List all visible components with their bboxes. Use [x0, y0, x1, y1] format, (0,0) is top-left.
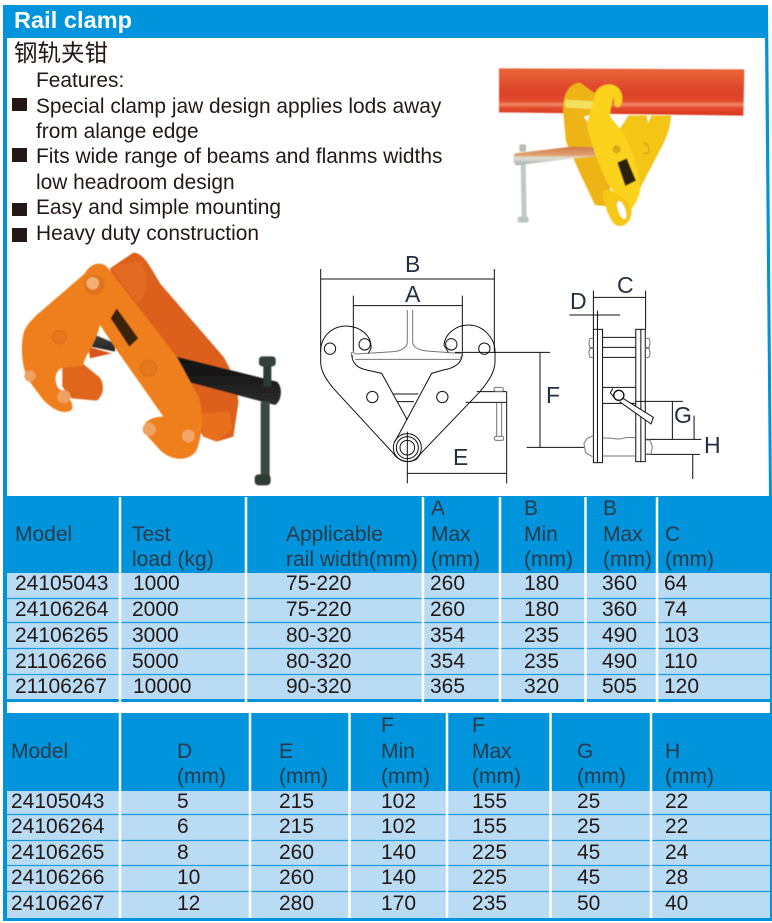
- table 2 rows: 155: [472, 790, 507, 813]
- table 1 rows: 90-320: [286, 675, 351, 698]
- table 1 header: rail width(mm): [286, 548, 418, 571]
- table 1 rows: 490: [602, 624, 637, 647]
- table 2 rows: 25: [577, 790, 600, 813]
- table 1 rows: 354: [430, 624, 465, 647]
- features list: low headroom design: [36, 171, 235, 194]
- table 2 rows: 50: [577, 892, 600, 915]
- table 1 rows: 21106266: [15, 650, 107, 673]
- table 1 header: (mm): [431, 548, 480, 571]
- table 2 rows: 5: [177, 790, 189, 813]
- table 1 rows: 235: [524, 650, 559, 673]
- table 2 rows: 10: [177, 866, 200, 889]
- title bar: Rail clamp: [14, 7, 132, 33]
- diagram dimension letters: A: [405, 281, 421, 307]
- features list: Fits wide range of beams and flanms widths: [36, 145, 442, 168]
- table 1 rows: 21106267: [15, 675, 107, 698]
- table 2 rows: 102: [381, 815, 416, 838]
- table 1 rows: 360: [602, 572, 637, 595]
- table 2 rows: 8: [177, 841, 189, 864]
- table 1 rows: 103: [664, 624, 699, 647]
- table 2 header: F: [472, 714, 485, 737]
- diagram dimension letters: [405, 251, 721, 470]
- table 1 header: (mm): [603, 548, 652, 571]
- table 2 rows: 24106267: [11, 892, 104, 915]
- table 2 header: (mm): [177, 765, 226, 788]
- table 1 rows: 1000: [133, 572, 180, 595]
- table 2 header: E: [279, 740, 293, 763]
- table 2 header: Min: [381, 740, 415, 763]
- table 1 header: Max: [603, 523, 643, 546]
- table 1 header: (mm): [524, 548, 573, 571]
- table 2 rows: 215: [279, 790, 314, 813]
- table 1 rows: 24106265: [15, 624, 108, 647]
- table 1 header: Applicable: [286, 523, 383, 546]
- table 1 rows: 75-220: [286, 598, 351, 621]
- table 2 header: Max: [472, 740, 512, 763]
- table 2 header: Model: [11, 740, 68, 763]
- table 2 rows: 260: [279, 866, 314, 889]
- table 2 rows: 225: [472, 866, 507, 889]
- table 2 header: G: [577, 740, 593, 763]
- table 2 rows: 24105043: [11, 790, 104, 813]
- table 1 header: B: [524, 497, 538, 520]
- table 2 rows: 28: [665, 866, 688, 889]
- features list: Heavy duty construction: [36, 222, 259, 245]
- features list: [12, 69, 442, 245]
- table 1 rows: 120: [664, 675, 699, 698]
- table 1 header: Model: [15, 523, 72, 546]
- photo: yellow clamp on red beam: [499, 68, 744, 226]
- table 2 rows: 170: [381, 892, 416, 915]
- table 1 rows: 10000: [133, 675, 191, 698]
- table 1 header: load (kg): [132, 548, 214, 571]
- table 2 rows: 24106264: [11, 815, 105, 838]
- table 1 header: Min: [524, 523, 558, 546]
- table 1 rows: 80-320: [286, 650, 351, 673]
- table 2 rows: 280: [279, 892, 314, 915]
- table 1 rows: 24105043: [15, 572, 108, 595]
- features list: Special clamp jaw design applies lods away: [36, 95, 442, 118]
- table 1 rows: 80-320: [286, 624, 351, 647]
- table 2 rows: 22: [665, 790, 688, 813]
- white gap between tables: [7, 702, 770, 713]
- table 1 rows: 320: [524, 675, 559, 698]
- table 1 rows: 260: [430, 598, 465, 621]
- table 1 rows: 365: [430, 675, 465, 698]
- table 2 header: [11, 714, 714, 788]
- table 1 header: [15, 497, 714, 571]
- table 1: model, load and dimensions A to C: [3, 496, 772, 702]
- table 1 rows: 354: [430, 650, 465, 673]
- diagram dimension letters: G: [674, 402, 692, 428]
- table 2 rows: [11, 790, 689, 915]
- chinese subtitle: 钢轨夹钳: [14, 34, 108, 68]
- table 1 rows: 3000: [132, 624, 179, 647]
- table 1 header: Test: [132, 523, 171, 546]
- table 2 rows: 140: [381, 841, 416, 864]
- features list: from alange edge: [36, 120, 199, 143]
- table 1 header: (mm): [665, 548, 714, 571]
- table 2 rows: 102: [381, 790, 416, 813]
- table 1 rows: 5000: [132, 650, 179, 673]
- table 2 rows: 45: [577, 841, 600, 864]
- diagram: front view of clamp with dimensions: [321, 269, 550, 483]
- table 2 rows: 155: [472, 815, 507, 838]
- table 1 rows: 2000: [132, 598, 179, 621]
- table 1 rows: 260: [430, 572, 465, 595]
- table 1 rows: 110: [664, 650, 697, 673]
- table 2 rows: 45: [577, 866, 600, 889]
- table 2 rows: 260: [279, 841, 314, 864]
- photo: orange clamp: [22, 253, 281, 485]
- table 2 rows: 6: [177, 815, 189, 838]
- table 2 rows: 235: [472, 892, 507, 915]
- table 2 header: H: [665, 740, 680, 763]
- table 1 rows: 490: [602, 650, 637, 673]
- table 1 header: B: [603, 497, 617, 520]
- table 2 rows: 215: [279, 815, 314, 838]
- table 2 header: (mm): [381, 765, 430, 788]
- table 2 header: (mm): [665, 765, 714, 788]
- table 2 rows: 24: [665, 841, 689, 864]
- table 1 rows: 360: [602, 598, 637, 621]
- table 1 header: A: [431, 497, 445, 520]
- diagram dimension letters: E: [453, 444, 468, 470]
- table 1 rows: 235: [524, 624, 559, 647]
- table 2 rows: 25: [577, 815, 600, 838]
- table 1 rows: 24106264: [15, 598, 109, 621]
- table 1 rows: 180: [524, 572, 559, 595]
- table 2 header: D: [177, 740, 192, 763]
- table 2 rows: 24106265: [11, 841, 104, 864]
- diagram dimension letters: B: [405, 251, 420, 277]
- table 2 header: F: [381, 714, 394, 737]
- features list: Features:: [36, 69, 124, 92]
- table 2 rows: 225: [472, 841, 507, 864]
- diagram dimension letters: D: [570, 288, 587, 314]
- table 2 header: (mm): [472, 765, 521, 788]
- features list: Easy and simple mounting: [36, 196, 281, 219]
- table 2 rows: 24106266: [11, 866, 104, 889]
- table 2 rows: 22: [665, 815, 688, 838]
- table 1 header: C: [665, 523, 680, 546]
- table 1 rows: 180: [524, 598, 559, 621]
- table 2 rows: 12: [177, 892, 200, 915]
- table 2 header: (mm): [279, 765, 328, 788]
- table 1 rows: [15, 572, 699, 698]
- table 1 header: Max: [431, 523, 471, 546]
- diagram: side view of clamp with dimensions: [550, 291, 702, 479]
- table 2 header: (mm): [577, 765, 626, 788]
- diagram dimension letters: C: [617, 272, 634, 298]
- table 1 rows: 505: [602, 675, 637, 698]
- table 2: dimensions D to H: [3, 713, 772, 918]
- table 1 rows: 64: [664, 572, 688, 595]
- table 1 rows: 75-220: [286, 572, 351, 595]
- table 2 rows: 40: [665, 892, 688, 915]
- table 1 rows: 74: [664, 598, 688, 621]
- diagram dimension letters: F: [546, 382, 560, 408]
- table 2 rows: 140: [381, 866, 416, 889]
- diagram dimension letters: H: [704, 432, 721, 458]
- white content panel: [7, 38, 769, 496]
